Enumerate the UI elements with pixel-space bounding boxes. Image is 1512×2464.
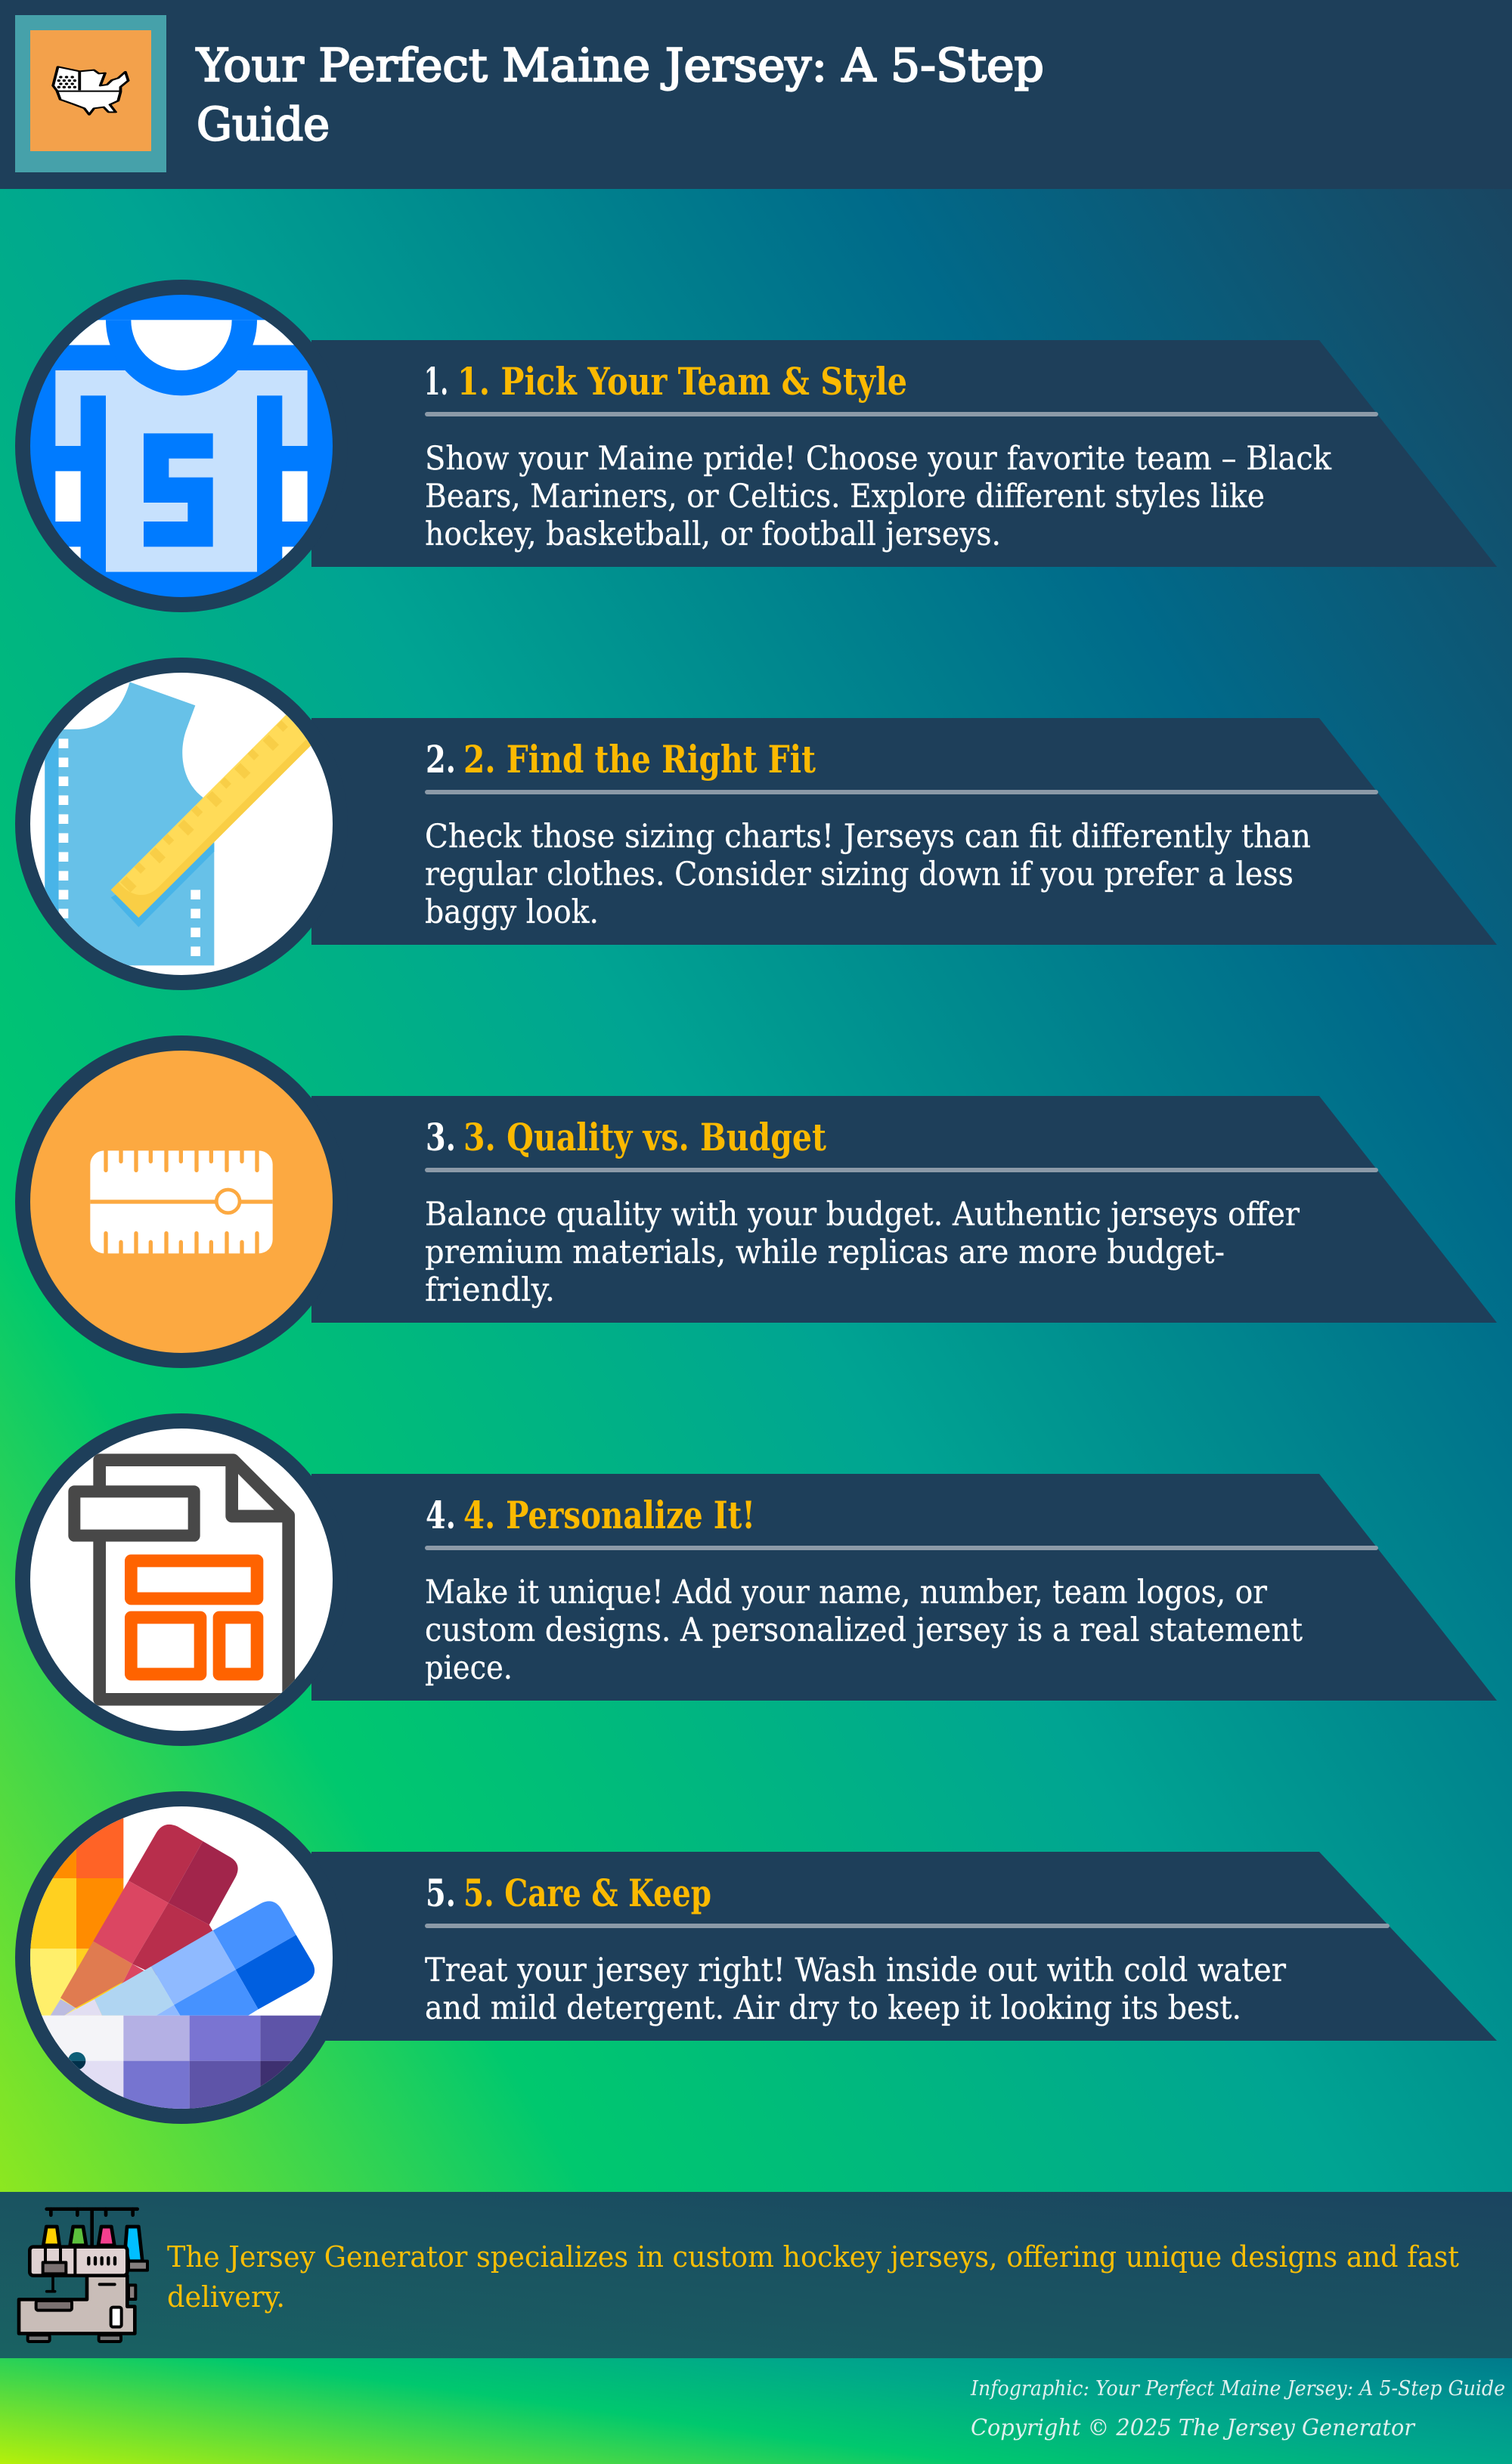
body text: friendly. (425, 1271, 555, 1309)
icon: colour swatches (30, 1806, 333, 2109)
body text: Bears, Mariners, or Celtics. Explore different styles like (425, 478, 1265, 515)
callout text: delivery. (167, 2280, 285, 2314)
title: Guide (197, 98, 330, 151)
heading: 4. (426, 1493, 456, 1537)
heading: 1. Pick Your Team & Style (457, 359, 907, 404)
circle frame (15, 658, 348, 990)
icon: measuring tape (30, 1051, 333, 1353)
callout text: The Jersey Generator specializes in custom hockey jerseys, offering unique designs and fast (167, 2240, 1459, 2274)
title: Your Perfect Maine Jersey: A 5-Step (196, 39, 1044, 92)
divider (425, 412, 1378, 416)
heading: 3. (426, 1115, 456, 1159)
credits: Copyright © 2025 The Jersey Generator (971, 2415, 1416, 2441)
body text: Show your Maine pride! Choose your favorite team – Black (425, 440, 1332, 478)
circle frame (15, 1791, 348, 2124)
footer strip gradient (0, 2358, 1512, 2464)
body text: premium materials, while replicas are more budget- (425, 1234, 1225, 1271)
body text: hockey, basketball, or football jerseys. (425, 515, 1001, 553)
body text: Treat your jersey right! Wash inside out with cold water (425, 1952, 1286, 1989)
icon: USA map logo (15, 15, 166, 172)
body text: regular clothes. Consider sizing down if you prefer a less (425, 856, 1294, 893)
panel: step 1 (15, 280, 1497, 612)
title (196, 39, 1044, 151)
heading: 4. Personalize It! (463, 1493, 755, 1537)
body text: Balance quality with your budget. Authentic jerseys offer (425, 1196, 1300, 1234)
banner (311, 1474, 1497, 1701)
panel: step 4 (15, 1413, 1497, 1746)
icon: document layout (30, 1429, 333, 1731)
body text (425, 440, 1332, 553)
heading (426, 1871, 711, 1915)
panel: step 2 (15, 658, 1497, 990)
footer banner (0, 2192, 1512, 2358)
heading: 3. Quality vs. Budget (463, 1115, 826, 1159)
body text (425, 1196, 1300, 1309)
banner (311, 1096, 1497, 1323)
circle frame (15, 1035, 348, 1368)
divider (425, 1924, 1390, 1928)
icon: garment and ruler (30, 673, 333, 975)
body text: Make it unique! Add your name, number, team logos, or (425, 1574, 1267, 1611)
divider (425, 790, 1378, 794)
body text (425, 818, 1311, 931)
heading: 5. (426, 1871, 456, 1915)
credits (970, 2377, 1505, 2441)
body text: custom designs. A personalized jersey is a real statement (425, 1611, 1303, 1649)
body text (425, 1574, 1303, 1687)
divider (425, 1168, 1378, 1172)
callout text (167, 2240, 1459, 2314)
banner (311, 1852, 1497, 2041)
body text: baggy look. (425, 893, 599, 931)
icon: overlock sewing machine (19, 2209, 147, 2342)
heading: 2. Find the Right Fit (463, 737, 816, 782)
divider (425, 1546, 1378, 1550)
body text (425, 1952, 1286, 2027)
banner (311, 340, 1497, 567)
heading: 5. Care & Keep (463, 1871, 711, 1915)
heading: 1. (424, 359, 448, 404)
banner (311, 718, 1497, 945)
panel: step 3 (15, 1035, 1497, 1368)
icon: jersey number 5 (30, 295, 333, 597)
circle frame (15, 1413, 348, 1746)
header banner (0, 0, 1512, 189)
body text: Check those sizing charts! Jerseys can fit differently than (425, 818, 1311, 856)
body text: piece. (425, 1649, 513, 1687)
heading: 2. (426, 737, 456, 782)
circle frame (15, 280, 348, 612)
panel: step 5 (15, 1791, 1497, 2124)
body text: and mild detergent. Air dry to keep it looking its best. (425, 1989, 1241, 2027)
